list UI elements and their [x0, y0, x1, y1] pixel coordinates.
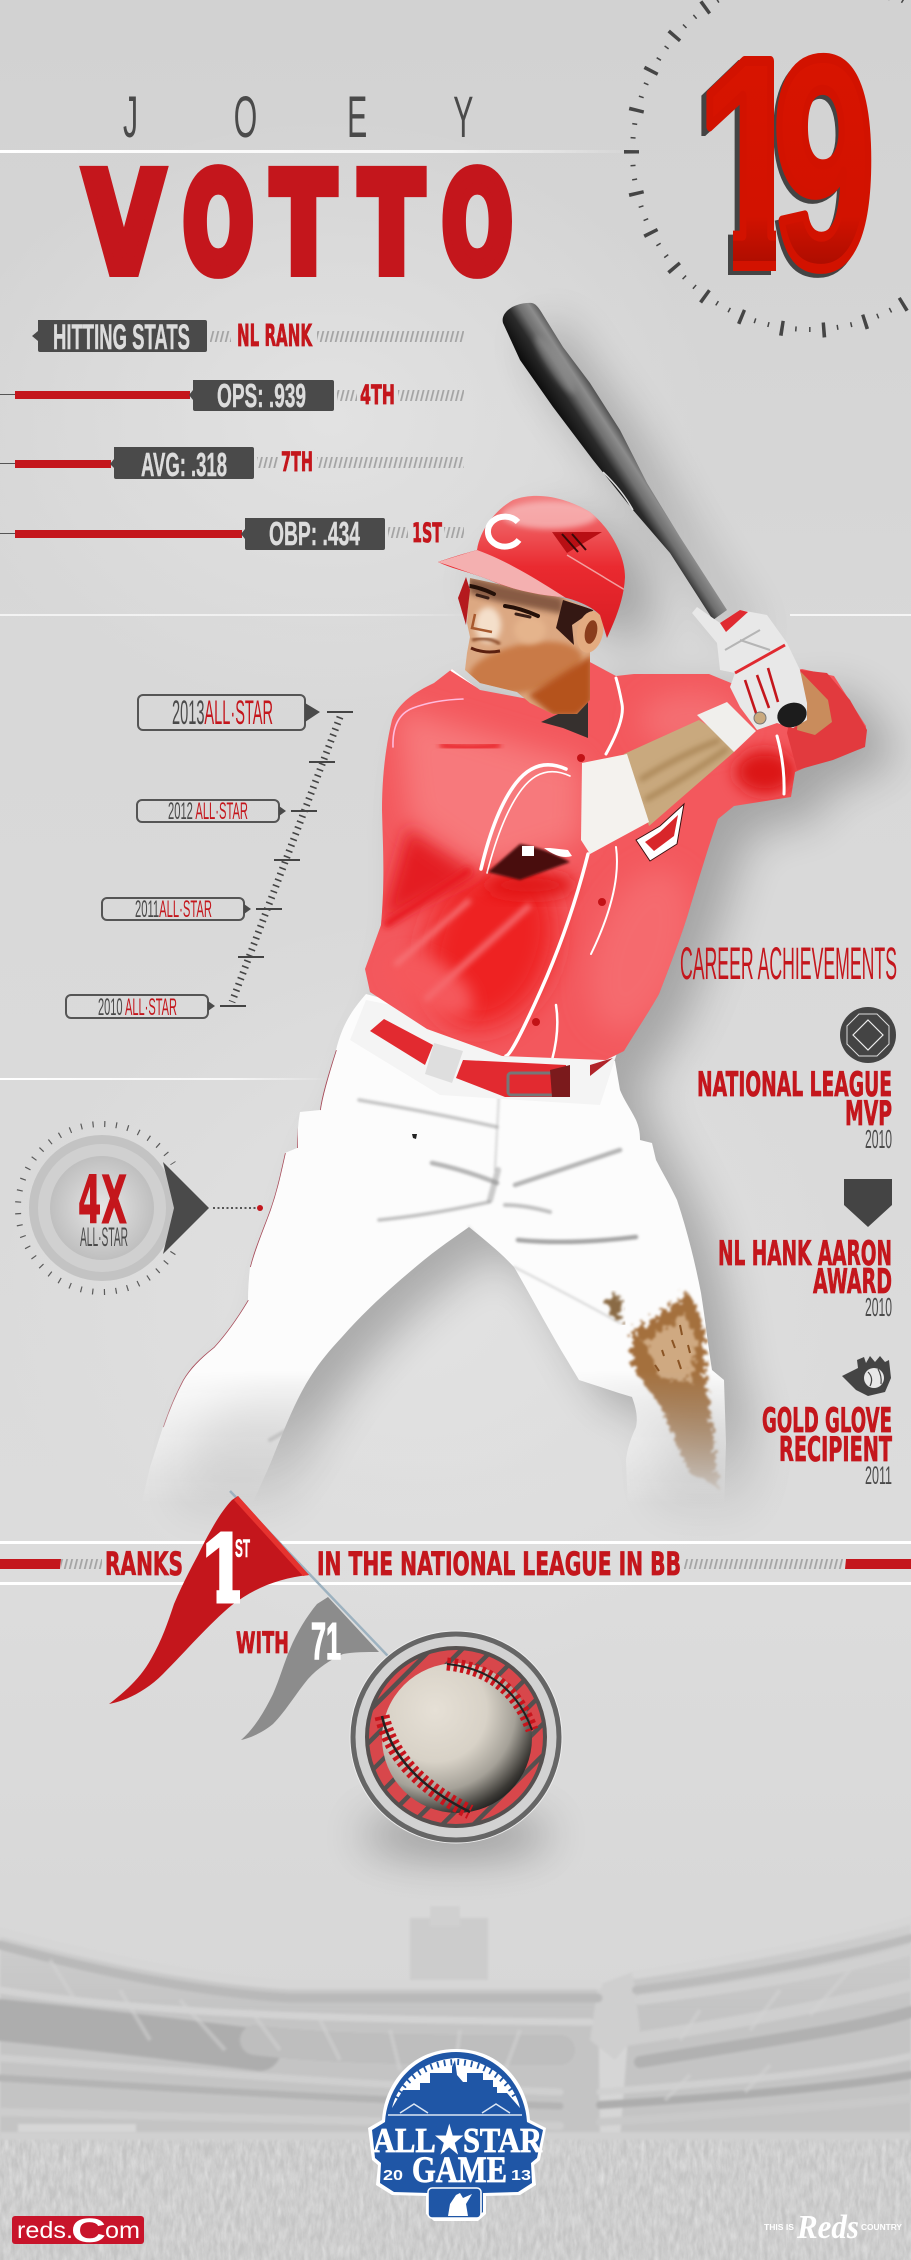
flag pole	[230, 1491, 407, 1676]
batting helmet	[438, 496, 625, 638]
jersey piping and number	[393, 670, 784, 1060]
logo stitches	[396, 2062, 516, 2098]
achievement: National League MVP	[697, 1007, 896, 1154]
red pennant: 1	[202, 1512, 246, 1624]
all-star game 2013 logo: GAME	[412, 2150, 507, 2191]
logo skyline	[392, 2058, 520, 2108]
last name: VOTTO: O	[442, 144, 513, 304]
2012 all-star label: 2012 ALL·STAR	[168, 798, 248, 825]
face and neck	[458, 577, 607, 716]
number extrusion	[701, 60, 850, 278]
icon: home plate	[844, 1179, 892, 1227]
hitting stats header: HITTING STATS	[53, 318, 190, 357]
2011 all-star label	[102, 896, 251, 923]
pants piping	[163, 1050, 336, 1427]
pants folds	[270, 1075, 636, 1440]
2013 all-star label: 2013ALL·STAR	[172, 694, 273, 732]
stat bar: OPS: OPS: .939	[217, 377, 306, 414]
white arm sleeve	[581, 754, 649, 854]
reds.com logo: reds.	[17, 2217, 73, 2243]
grass field	[0, 2132, 911, 2260]
hitting stats header	[32, 318, 464, 357]
logo white outline	[368, 2049, 546, 2221]
baseball medallion	[350, 1631, 562, 1857]
achievement: NL Hank Aaron Award	[718, 1179, 892, 1322]
white pants	[140, 994, 726, 1510]
2013 all-star label	[138, 694, 320, 732]
grass and dirt stain	[605, 1293, 718, 1487]
last name: VOTTO: O	[183, 144, 254, 304]
red pennant	[109, 1496, 309, 1704]
first name: JOEY: JOEY	[123, 84, 473, 150]
4X all-star badge: 4X	[78, 1162, 127, 1239]
jersey number 19	[701, 52, 872, 278]
icon: glove and ball	[842, 1356, 891, 1396]
stat bar: AVG: 7TH	[281, 447, 313, 478]
2010 all-star label	[66, 994, 215, 1021]
all-star game 2013 logo: 13	[511, 2167, 531, 2184]
divider lines	[0, 150, 911, 1080]
red belt	[350, 1000, 618, 1105]
stadium seating and structure	[0, 1906, 911, 2140]
2011 all-star label: 2011ALL·STAR	[135, 896, 212, 923]
reds.com logo: om	[105, 2217, 140, 2243]
2012 all-star label	[137, 798, 286, 825]
logo wordmark: ALL★STAR	[373, 2121, 543, 2160]
red jersey	[365, 661, 866, 1060]
number face: 1	[696, 0, 808, 330]
reds.com logo: C	[71, 2212, 106, 2250]
walks banner: RANKS	[105, 1545, 183, 1583]
batting gloves and bat knob	[692, 607, 810, 731]
2010 all-star label: 2010 ALL·STAR	[98, 994, 177, 1021]
number extrusion: 1	[691, 1, 803, 334]
gray pennant: 71	[311, 1613, 341, 1671]
timeline scale	[220, 712, 353, 1006]
stat bar: OBP: 1ST	[412, 518, 442, 549]
walks banner	[0, 1491, 911, 1740]
jersey shading	[376, 692, 795, 1046]
logo blue crest	[372, 2052, 543, 2218]
this is reds country tagline	[764, 2209, 903, 2246]
this is reds country tagline: THIS IS	[764, 2223, 795, 2232]
icon: baseball diamond	[840, 1007, 896, 1063]
red pennant: ST	[235, 1535, 250, 1563]
player drop shadow	[168, 325, 894, 1532]
stat bar: OBP: OBP: .434	[269, 515, 360, 552]
logo bridge	[388, 2104, 522, 2115]
dark undershirt	[541, 700, 588, 738]
stat bar: OPS: 4TH	[360, 380, 395, 411]
number face	[706, 52, 872, 274]
all-star game 2013 logo	[368, 2049, 546, 2221]
banner rules	[0, 1541, 911, 1585]
last name: VOTTO: T	[360, 146, 423, 304]
right forearm and elbow sleeve	[787, 670, 867, 770]
stat bar: AVG	[0, 446, 464, 483]
stat bar: AVG: AVG: .318	[141, 446, 227, 483]
4X all-star badge	[18, 1124, 263, 1292]
last name: VOTTO: T	[272, 146, 335, 304]
baseball bat	[503, 303, 727, 620]
banner accents	[0, 1559, 911, 1569]
achievement: Gold Glove	[762, 1356, 892, 1490]
hitting stats header: NL RANK	[237, 319, 313, 354]
this is reds country tagline: Reds	[796, 2209, 859, 2246]
white wristband	[697, 702, 756, 752]
walks banner: IN THE NATIONAL LEAGUE IN BB	[317, 1545, 681, 1583]
logo MLB shield	[428, 2188, 481, 2218]
stat bar: OPS	[0, 377, 464, 414]
4X all-star badge: ALL·STAR	[80, 1222, 128, 1252]
left forearm	[624, 720, 734, 826]
clock dial ticks	[632, 0, 911, 330]
this is reds country tagline: COUNTRY	[861, 2223, 903, 2232]
baseball	[382, 1663, 532, 1813]
seams	[382, 1664, 532, 1812]
walks banner: WITH	[236, 1626, 289, 1660]
last name: VOTTO: V	[85, 146, 163, 304]
player: Joey Votto batting	[140, 303, 894, 1532]
all-star game 2013 logo: 20	[383, 2167, 403, 2184]
last name: VOTTO	[85, 144, 513, 304]
reds.com logo	[12, 2212, 144, 2250]
ear	[573, 609, 607, 655]
background: stadium	[0, 1906, 911, 2260]
all-star timeline	[66, 694, 353, 1021]
gray pennant	[241, 1597, 379, 1740]
stat bar: OBP	[0, 515, 464, 552]
